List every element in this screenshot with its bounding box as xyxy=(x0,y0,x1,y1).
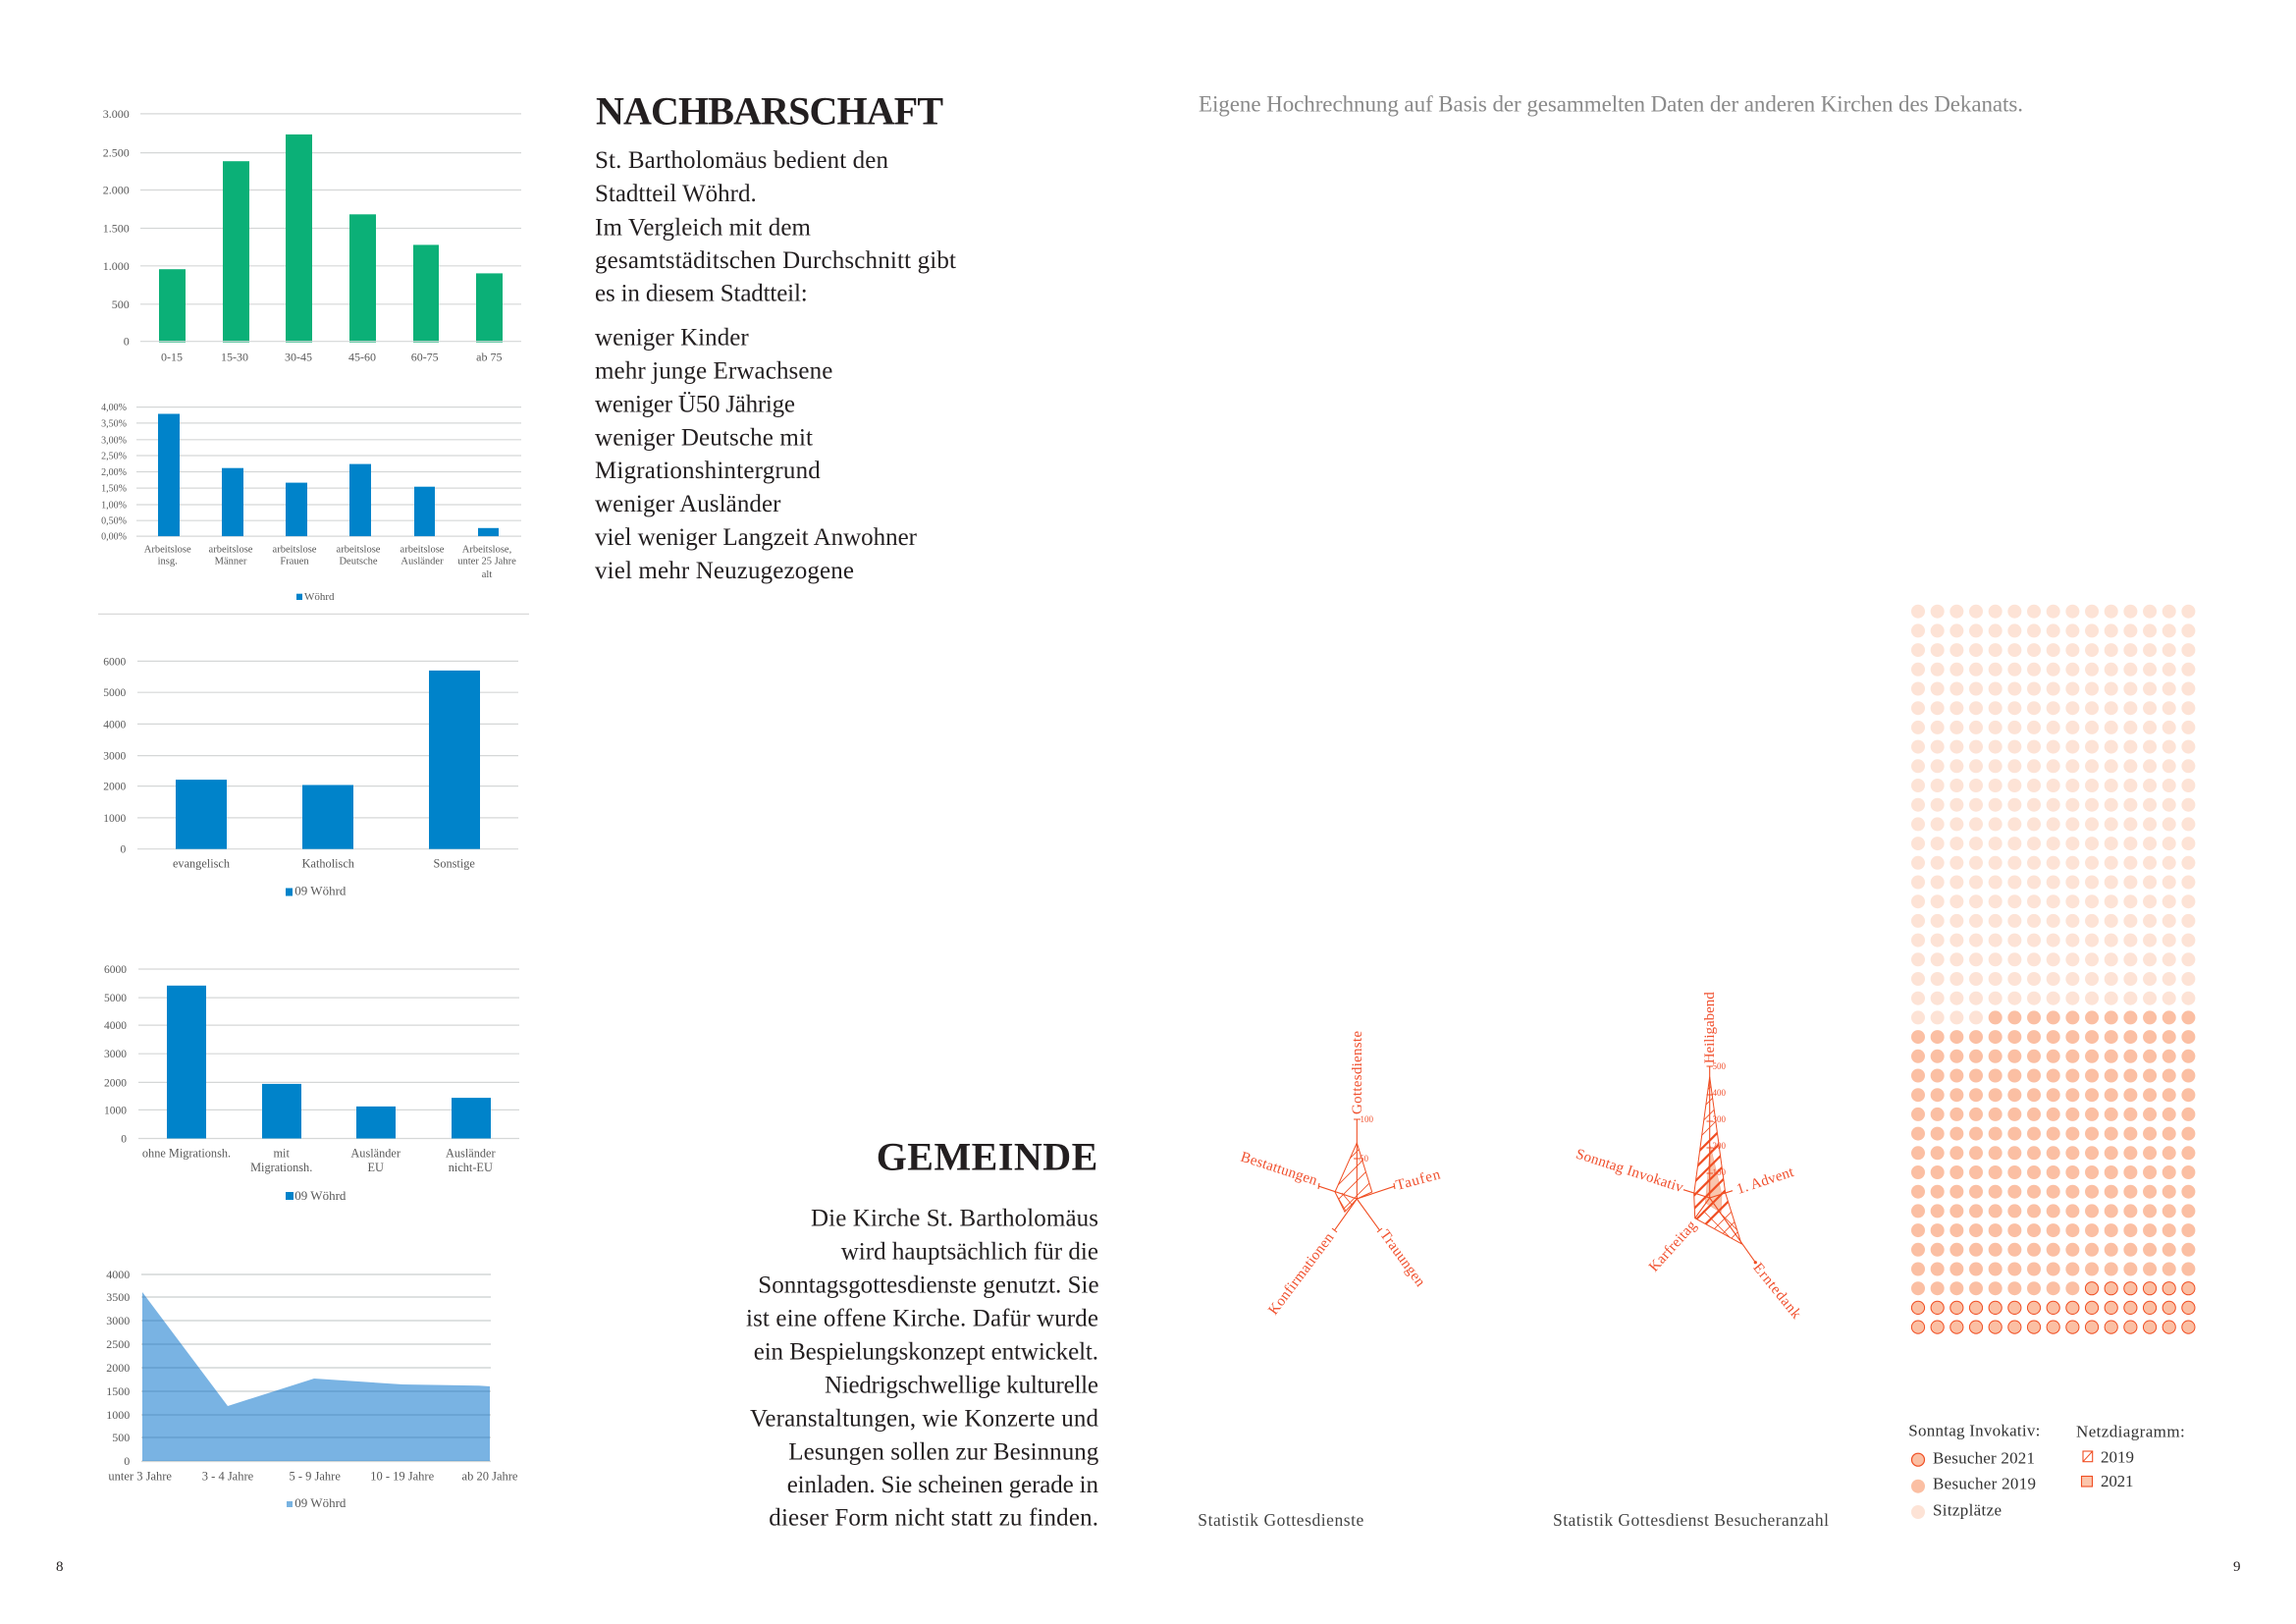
radar scale: 100 xyxy=(1361,1114,1374,1124)
y axis labels: 1000 xyxy=(103,813,127,825)
legend: 09 Wöhrd xyxy=(294,1495,347,1510)
text block: Gemeinde: dieser Form nicht statt zu finden. xyxy=(769,1504,1098,1531)
x axis labels: unter 25 Jahre xyxy=(457,557,516,568)
y axis labels: 3,50% xyxy=(101,418,127,429)
x axis labels: 15-30 xyxy=(221,351,248,364)
x axis labels: unter 3 Jahre xyxy=(108,1469,172,1483)
text block: Nachbarschaft intro: gesamtstäditschen Durchschnitt gibt xyxy=(595,247,956,274)
y axis labels: 1.500 xyxy=(103,222,130,236)
y axis labels: 1000 xyxy=(104,1105,127,1116)
text block: Nachbarschaft list: viel mehr Neuzugezogene xyxy=(595,558,854,584)
text block: Nachbarschaft intro: es in diesem Stadtteil: xyxy=(595,281,808,307)
x axis labels: EU xyxy=(367,1161,384,1174)
dot matrix: seats and visitors xyxy=(1918,612,2189,1327)
text block: Nachbarschaft list xyxy=(595,325,918,584)
y axis labels: 0,50% xyxy=(101,516,127,527)
y axis labels: 5000 xyxy=(104,993,127,1004)
y axis labels: 500 xyxy=(112,298,130,311)
radar polygon 2019 xyxy=(1693,1076,1742,1245)
text block: Gemeinde: einladen. Sie scheinen gerade in xyxy=(787,1472,1099,1498)
y axis labels: 6000 xyxy=(103,656,127,668)
x axis labels: 60-75 xyxy=(411,351,439,364)
page number right: 9 xyxy=(2233,1559,2240,1575)
y axis labels: 4000 xyxy=(103,719,127,731)
x axis labels: nicht-EU xyxy=(449,1161,493,1174)
text block: Nachbarschaft list: weniger Deutsche mit xyxy=(595,424,813,452)
area shape xyxy=(142,1292,490,1461)
radar axis labels: Karfreitag xyxy=(1646,1218,1700,1275)
radar scale: 100 xyxy=(1712,1167,1726,1177)
text block: Nachbarschaft intro: Im Vergleich mit dem xyxy=(595,214,812,241)
dots: visitors 2021 xyxy=(1918,1288,2189,1327)
page number left: 8 xyxy=(56,1559,63,1575)
radar scale xyxy=(1712,1061,1726,1177)
x axis labels: ab 20 Jahre xyxy=(462,1469,518,1483)
text block: Gemeinde xyxy=(746,1205,1099,1531)
text block: Gemeinde: Niedrigschwellige kulturelle xyxy=(825,1372,1098,1398)
radar axis labels: Sonntag Invokativ xyxy=(1574,1147,1685,1196)
radar chart: services xyxy=(1239,1031,1442,1318)
legend: 09 Wöhrd xyxy=(294,883,347,897)
note: own projection: Eigene Hochrechnung auf Basis der gesammelten Daten der anderen Kirchen des Dekanats. xyxy=(1199,92,2023,116)
text block: Nachbarschaft list: mehr junge Erwachsene xyxy=(595,357,832,385)
y axis labels: 2.000 xyxy=(103,183,130,196)
y axis labels: 6000 xyxy=(104,964,127,976)
heading: Nachbarschaft: NACHBARSCHAFT xyxy=(596,89,943,134)
y axis labels: 4000 xyxy=(106,1268,130,1281)
y axis labels: 3000 xyxy=(103,751,127,763)
text block: Gemeinde: Lesungen sollen zur Besinnung xyxy=(788,1439,1099,1466)
y axis labels: 2,50% xyxy=(101,452,127,461)
y axis labels: 3000 xyxy=(106,1314,130,1327)
x axis labels: arbeitslose xyxy=(273,545,317,556)
x axis labels: arbeitslose xyxy=(209,545,253,556)
radar axis labels: Heiligabend xyxy=(1702,992,1718,1063)
y axis labels: 0 xyxy=(124,1454,130,1468)
y axis labels: 3500 xyxy=(106,1290,130,1304)
radar axis labels: Bestattungen xyxy=(1239,1150,1319,1189)
bar chart: unemployment xyxy=(101,403,521,603)
radar scale: 500 xyxy=(1712,1061,1726,1071)
bar chart: migration xyxy=(104,964,519,1203)
radar axis labels: Gottesdienste xyxy=(1350,1031,1365,1114)
text block: Nachbarschaft intro: St. Bartholomäus bedient den xyxy=(595,147,889,174)
legend: Sonntag Invokativ xyxy=(1908,1422,2040,1519)
text block: Gemeinde: Veranstaltungen, wie Konzerte und xyxy=(750,1405,1099,1432)
y axis labels: 4,00% xyxy=(101,403,127,413)
y axis labels: 5000 xyxy=(103,687,127,699)
radar axes xyxy=(1318,1119,1395,1232)
legend: Sonntag Invokativ: Sonntag Invokativ: xyxy=(1908,1422,2040,1440)
radar axis labels: 1. Advent xyxy=(1735,1164,1796,1198)
text block: Nachbarschaft intro: Stadtteil Wöhrd. xyxy=(595,181,757,207)
radar axis labels xyxy=(1239,1031,1442,1318)
radar axis labels: Taufen xyxy=(1394,1166,1442,1194)
radar axes xyxy=(1683,1066,1755,1263)
text block: Nachbarschaft list: Migrationshintergrund xyxy=(595,458,821,484)
y axis labels: 500 xyxy=(112,1431,130,1444)
y axis labels: 2000 xyxy=(103,782,127,793)
radar scale: 400 xyxy=(1712,1088,1726,1098)
x axis labels xyxy=(173,856,475,870)
x axis labels xyxy=(144,545,516,580)
legend: Netzdiagramm: 2021 xyxy=(2101,1472,2134,1490)
heading: Gemeinde: GEMEINDE xyxy=(877,1135,1097,1179)
y axis labels: 0 xyxy=(124,335,130,349)
x axis labels: arbeitslose xyxy=(337,545,381,556)
dots: visitors 2019 xyxy=(1918,1017,2189,1288)
radar chart: visitors xyxy=(1574,992,1804,1323)
text block: Gemeinde: Die Kirche St. Bartholomäus xyxy=(811,1205,1098,1231)
y axis labels: 2.500 xyxy=(103,146,130,160)
y axis labels: 1,00% xyxy=(101,501,127,511)
bar chart: religion xyxy=(103,656,518,897)
y axis labels: 1.000 xyxy=(103,259,130,273)
y axis labels xyxy=(104,964,127,1145)
x axis labels: Migrationsh. xyxy=(250,1161,312,1174)
y axis labels xyxy=(103,107,130,349)
caption: Statistik Besucheranzahl: Statistik Gottesdienst Besucheranzahl xyxy=(1553,1510,1829,1530)
bars: unemployment xyxy=(158,414,499,536)
text block: Gemeinde: ein Bespielungskonzept entwickelt. xyxy=(754,1338,1098,1365)
x axis labels: insg. xyxy=(158,557,178,568)
x axis labels: Männer xyxy=(215,557,247,568)
y axis labels: 3.000 xyxy=(103,107,130,121)
x axis labels: ab 75 xyxy=(476,351,502,364)
radar axis labels: Trauungen xyxy=(1376,1227,1428,1290)
text block: Nachbarschaft list: viel weniger Langzeit Anwohner xyxy=(595,524,918,551)
legend: Wöhrd xyxy=(304,591,335,603)
radar polygon 2021 xyxy=(1705,1146,1722,1213)
y axis labels: 2,00% xyxy=(101,467,127,478)
x axis labels xyxy=(142,1147,496,1174)
legend: Sonntag Invokativ: Besucher 2021 xyxy=(1933,1449,2035,1468)
x axis labels: Katholisch xyxy=(302,856,354,870)
x axis labels: arbeitslose xyxy=(400,545,445,556)
radar scale xyxy=(1360,1114,1374,1164)
y axis labels: 0,00% xyxy=(101,532,127,543)
x axis labels: 0-15 xyxy=(161,351,183,364)
x axis labels: Frauen xyxy=(280,557,309,568)
bars: migration xyxy=(167,986,491,1139)
x axis labels: 30-45 xyxy=(285,351,312,364)
y axis labels: 1500 xyxy=(106,1384,130,1398)
x axis labels: Arbeitslose, xyxy=(462,545,511,556)
x axis labels: mit xyxy=(273,1147,290,1161)
y axis labels: 3,00% xyxy=(101,435,127,446)
y axis labels xyxy=(101,403,127,543)
text block: Gemeinde: wird hauptsächlich für die xyxy=(841,1239,1098,1266)
y axis labels: 1000 xyxy=(106,1408,130,1422)
y axis labels: 2000 xyxy=(106,1361,130,1375)
y axis labels: 2000 xyxy=(104,1077,127,1089)
radar axis labels xyxy=(1574,992,1804,1323)
radar end markers xyxy=(1754,1261,1757,1264)
x axis labels: 5 - 9 Jahre xyxy=(289,1469,341,1483)
x axis labels: alt xyxy=(482,569,492,580)
legend: Sonntag Invokativ: Besucher 2019 xyxy=(1933,1475,2036,1493)
x axis labels: Ausländer xyxy=(400,557,444,568)
bars: religion xyxy=(176,671,480,849)
text block: Nachbarschaft list: weniger Ü50 Jährige xyxy=(595,392,795,418)
legend: Sonntag Invokativ: Sitzplätze xyxy=(1933,1500,2002,1519)
text block: Gemeinde: Sonntagsgottesdienste genutzt. Sie xyxy=(758,1272,1099,1299)
x axis labels: ohne Migrationsh. xyxy=(142,1147,231,1161)
x axis labels: 10 - 19 Jahre xyxy=(370,1469,435,1483)
radar scale: 300 xyxy=(1712,1114,1726,1124)
y axis labels: 3000 xyxy=(104,1049,127,1060)
y axis labels: 1,50% xyxy=(101,484,127,495)
y axis labels: 0 xyxy=(121,1133,127,1145)
x axis labels: evangelisch xyxy=(173,856,230,870)
y axis labels: 2500 xyxy=(106,1337,130,1351)
text block: Nachbarschaft intro xyxy=(595,147,956,307)
legend: Netzdiagramm: Netzdiagramm: xyxy=(2076,1422,2185,1440)
bar chart: age groups xyxy=(103,107,521,364)
radar scale: 200 xyxy=(1712,1141,1726,1151)
y axis labels xyxy=(106,1268,130,1468)
x axis labels: 45-60 xyxy=(348,351,376,364)
x axis labels: Deutsche xyxy=(339,557,378,568)
legend: Netzdiagramm xyxy=(2076,1422,2185,1490)
dots: seats xyxy=(1918,612,2189,1017)
x axis labels xyxy=(161,351,502,364)
text block: Nachbarschaft list: weniger Kinder xyxy=(595,325,749,352)
y axis labels: 0 xyxy=(121,844,127,856)
text block: Nachbarschaft list: weniger Ausländer xyxy=(595,491,781,517)
radar axis labels: Konfirmationen xyxy=(1265,1230,1338,1318)
x axis labels: Ausländer xyxy=(350,1147,400,1161)
x axis labels: Arbeitslose xyxy=(144,545,191,556)
radar scale: 50 xyxy=(1360,1154,1368,1164)
x axis labels xyxy=(108,1469,518,1483)
radar polygon 2019 xyxy=(1335,1142,1372,1214)
x axis labels: 3 - 4 Jahre xyxy=(202,1469,254,1483)
x axis labels: Ausländer xyxy=(446,1147,496,1161)
caption: Statistik Gottesdienste: Statistik Gottesdienste xyxy=(1198,1510,1364,1530)
radar axis labels: Erntedank xyxy=(1749,1260,1804,1323)
y axis labels: 4000 xyxy=(104,1020,127,1032)
legend: Netzdiagramm: 2019 xyxy=(2101,1447,2134,1466)
text block: Gemeinde: ist eine offene Kirche. Dafür wurde xyxy=(746,1306,1098,1332)
bars: age groups xyxy=(159,135,503,343)
y axis labels xyxy=(103,656,127,856)
x axis labels: Sonstige xyxy=(434,856,475,870)
area chart: children by age xyxy=(106,1268,518,1510)
legend: 09 Wöhrd xyxy=(294,1188,347,1203)
